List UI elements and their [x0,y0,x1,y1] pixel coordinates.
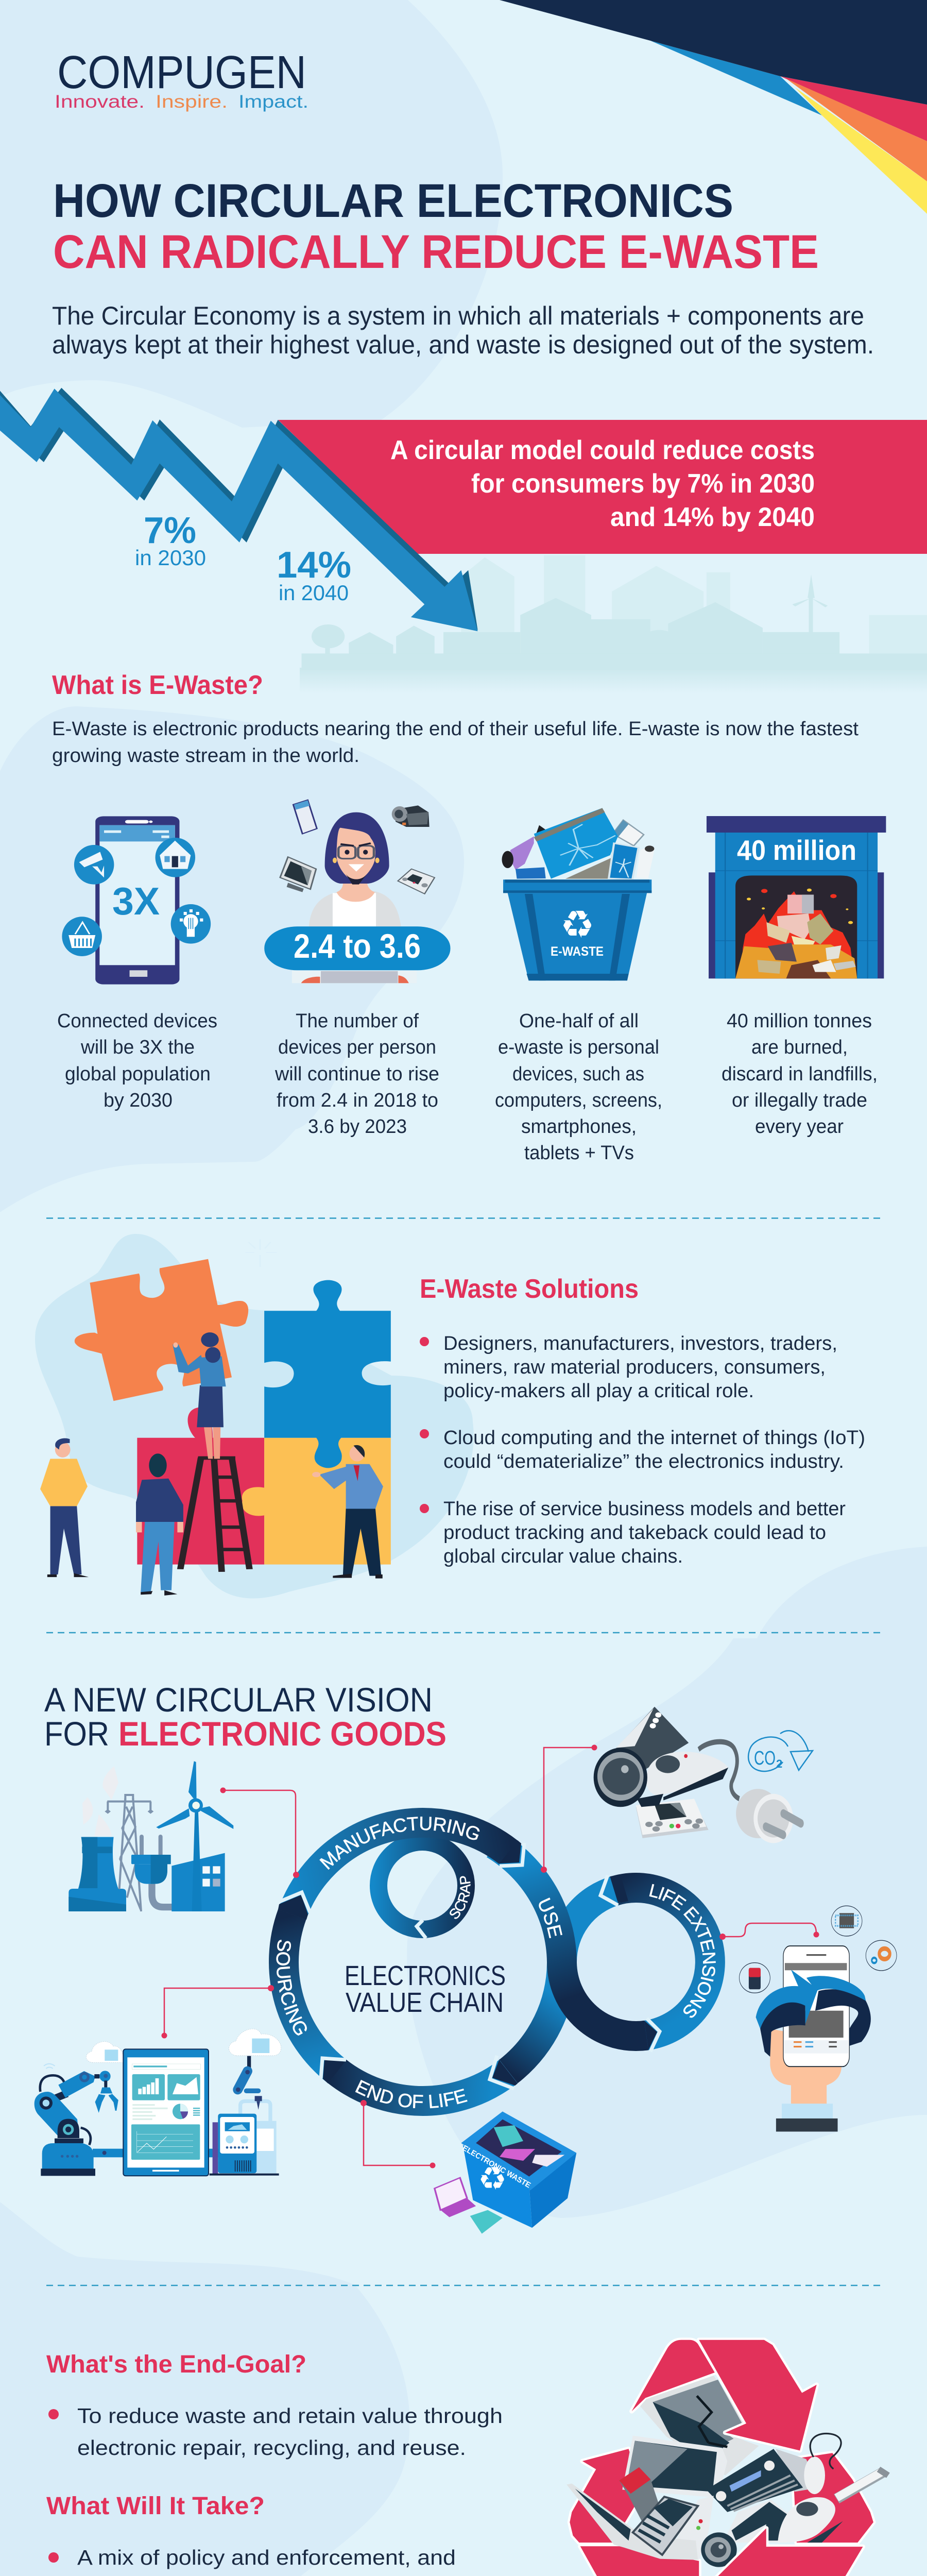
caption: personal devices: tablets + TVs [524,1142,634,1164]
bullet: what it will take: A mix of policy and enforcement, and [77,2546,456,2569]
icon: phone with connected devices: 3X [112,879,160,923]
section: what it will take [46,2493,456,2576]
icon: 40 million burning furnace: 40 million [737,834,856,866]
ring: lower right to loop [508,1891,614,2072]
ring labels: MANUFACTURING [319,1817,480,1870]
ring: scrap: SCRAP [450,1876,471,1919]
bullet: end goal [48,2404,503,2460]
icon: person with devices: 2.4 to 3.6 [294,927,421,965]
heading: what is e-waste: What is E-Waste? [52,670,263,700]
heading: new circular vision: FOR [44,1715,109,1753]
caption: devices per person: devices per person [278,1037,436,1058]
e-waste definition: E-Waste is electronic products nearing the end of their useful life. E-waste is now the fastest [52,718,859,740]
connector dots [162,1744,819,2168]
icon: camera, iron, game, plug and CO2 [594,1707,813,1843]
logo tagline: Innovate. [55,92,145,112]
robot arm left [40,2075,91,2145]
caption: devices per person [274,1010,439,1138]
caption: devices per person: 3.6 by 2023 [308,1116,407,1138]
caption: devices per person: from 2.4 in 2018 to [277,1090,438,1111]
person: woman on ladder [173,1332,226,1459]
tablet [123,2049,209,2176]
icon: hand holding phone with refresh arrow [740,1906,897,2131]
callout text: and 14% by 2040 [610,502,815,532]
recycling symbol: ♻ [560,903,594,947]
electronics value chain diagram [269,1808,725,2116]
bullet 1: Designers, manufacturers, investors, traders, [443,1333,837,1354]
heading: end goal: What's the End-Goal? [46,2351,306,2378]
callout text [390,435,815,532]
top right corner ribbons [500,0,927,214]
section: end goal [46,2351,503,2460]
icon: robotic factory with tablet [35,2029,281,2176]
column captions [57,1010,878,1164]
bullet 2 [420,1427,865,1472]
falling arrow [0,388,478,631]
CO2 icon: 2 [776,1757,782,1770]
callout text: A circular model could reduce costs [390,435,815,465]
pink callout banner [278,420,927,554]
puzzle piece: blue [264,1280,391,1468]
icon: electronic waste isometric bin: ELECTRONIC WASTE [461,2144,532,2190]
city skyline [301,555,927,670]
bullet 2: Cloud computing and the internet of things (IoT) [443,1427,865,1449]
icon: person with devices [264,800,450,983]
stat: 14% in 2040: in 2040 [279,581,349,605]
ring labels: LIFE EXTENSIONS [649,1884,716,2018]
intro paragraph [52,301,874,359]
clouds [86,2029,281,2062]
callout text: for consumers by 7% in 2030 [471,469,815,499]
icon: electronic waste isometric bin: ♻ [478,2160,507,2197]
ring: use to loop [494,1844,646,2036]
ring: manufacturing [292,1823,508,1914]
title [53,175,819,278]
puzzle piece: pink [137,1408,264,1565]
ladder [180,1458,249,1572]
caption: connected devices: by 2030 [104,1090,173,1111]
recycle arrows behind the pile [570,2340,873,2576]
caption: 40 million tonnes [722,1010,878,1138]
robot arm right [247,2056,251,2068]
caption: 40 million tonnes: or illegally trade [732,1090,867,1111]
caption: devices per person: The number of [296,1010,419,1032]
caption: personal devices: devices, such as [512,1063,644,1085]
title: CAN RADICALLY REDUCE E-WASTE [53,226,819,278]
intro paragraph: The Circular Economy is a system in which all materials + components are [52,301,864,330]
ring: end of life [337,2072,508,2101]
bullet: what it will take [48,2546,456,2576]
recycle arrows in front of the pile [699,2340,863,2576]
bullet 3: The rise of service business models and better [443,1498,846,1520]
solutions bullet list [420,1333,865,1567]
ring labels: END OF LIFE [355,2079,468,2108]
puzzle illustration with people [40,1240,391,1596]
person: man in yellow sweater [40,1438,89,1577]
bullet 2: could “dematerialize” the electronics industry. [443,1451,844,1472]
heading: new circular vision: A NEW CIRCULAR VISION [44,1681,433,1719]
icon: energy plant with turbine [68,1761,233,1911]
icon: phone with connected devices [62,816,211,985]
person: man in blue suit [312,1445,383,1579]
e-waste definition [52,718,859,767]
logo tagline: Impact. [238,92,308,112]
e-waste definition: growing waste stream in the world. [52,745,359,767]
heading: new circular vision [44,1681,447,1753]
caption: personal devices: One-half of all [519,1010,639,1032]
caption: connected devices: global population [65,1063,211,1085]
bullet: end goal: To reduce waste and retain value through [77,2404,503,2428]
bullet 3: product tracking and takeback could lead to [443,1522,826,1544]
icon: electronic waste isometric bin [435,2111,576,2234]
puzzle piece: orange [75,1259,248,1401]
caption: personal devices: e-waste is personal [498,1037,659,1058]
ring labels: USE [539,1897,562,1938]
CO2 icon: CO [754,1748,776,1769]
person: man in navy sweater [136,1453,183,1596]
caption: 40 million tonnes: discard in landfills, [722,1063,878,1085]
logo tagline [55,92,308,112]
heading: what will it take: What Will It Take? [46,2493,265,2520]
ring: scrap [370,1837,475,1939]
stat: 7% in 2030: in 2030 [135,546,206,570]
caption: connected devices: Connected devices [57,1010,217,1032]
connector lines [164,1748,816,2165]
ring: second loop base [613,1888,710,2036]
caption: personal devices: computers, screens, [495,1090,662,1111]
center label: VALUE CHAIN [346,1987,504,2018]
puzzle piece: yellow [242,1438,391,1565]
intro paragraph: always kept at their highest value, and waste is designed out of the system. [52,330,874,359]
icon: e-waste bin: E-WASTE [551,944,604,959]
ring: sourcing [284,1914,337,2072]
stat: 14% in 2040 [277,545,351,605]
stat: 14% in 2040: 14% [277,545,351,586]
ring labels: SOURCING [276,1939,307,2036]
icon: 40 million burning furnace [707,816,886,978]
stat: 7% in 2030: 7% [144,510,196,551]
caption: connected devices [57,1010,217,1111]
caption: personal devices: smartphones, [521,1116,637,1138]
center label [345,1960,506,2018]
CO2 icon [748,1731,813,1771]
bullet 3 [420,1498,846,1567]
title: HOW CIRCULAR ELECTRONICS [53,175,733,227]
heading: e-waste solutions: E-Waste Solutions [420,1274,639,1304]
logo [55,47,308,112]
recycling symbol with devices [566,2340,888,2576]
center label: ELECTRONICS [345,1960,506,1991]
icon: e-waste bin [502,808,655,980]
machine right [213,2122,218,2174]
stat: 7% in 2030 [135,510,206,570]
caption: 40 million tonnes: every year [755,1116,844,1138]
caption: devices per person: will continue to rise [274,1063,439,1085]
bullet: end goal: electronic repair, recycling, and reuse. [77,2436,466,2460]
heading: new circular vision: ELECTRONIC GOODS [118,1715,447,1753]
ring labels [276,1817,716,2108]
caption: 40 million tonnes: 40 million tonnes [727,1010,872,1032]
logo wordmark: COMPUGEN [57,47,306,98]
skyline ground fade [300,668,927,693]
logo tagline: Inspire. [156,92,228,112]
wifi [44,2064,55,2069]
caption: 40 million tonnes: are burned, [751,1037,848,1058]
bullet 1 [420,1333,837,1402]
device pile [566,2376,888,2567]
caption: personal devices [495,1010,662,1164]
bullet 1: miners, raw material producers, consumers, [443,1357,826,1378]
bullet 1: policy-makers all play a critical role. [443,1380,754,1402]
caption: connected devices: will be 3X the [80,1037,195,1058]
bullet 3: global circular value chains. [443,1546,683,1567]
